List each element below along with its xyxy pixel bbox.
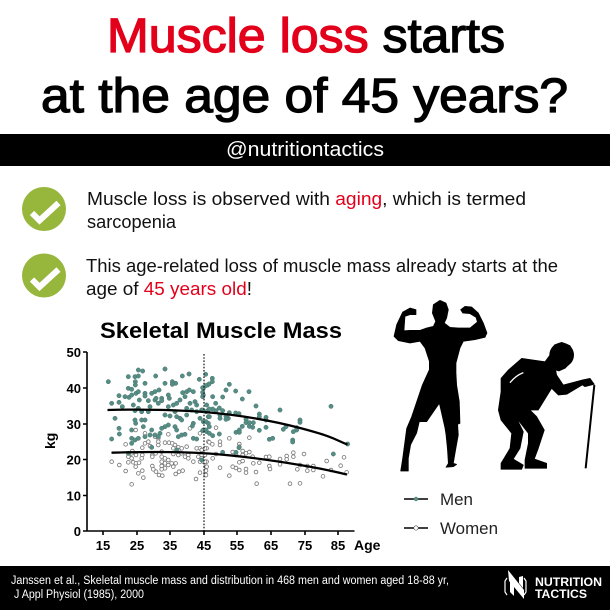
x axis labels: 25 <box>130 538 144 553</box>
men trend line <box>108 410 348 444</box>
axes <box>83 352 354 535</box>
x axis labels <box>96 538 345 553</box>
women trend line <box>112 452 347 474</box>
y axis labels: 50 <box>67 345 81 360</box>
bullet text 2 <box>86 256 558 299</box>
legend: women: Women <box>440 520 498 538</box>
y axis title: kg <box>42 433 58 449</box>
y axis labels: 20 <box>67 452 81 468</box>
footer <box>0 566 610 610</box>
icon: muscular man silhouette <box>394 300 487 471</box>
age 45 marker <box>203 354 205 531</box>
bullet 2 <box>22 254 558 299</box>
citation: Janssen et al., Skeletal muscle mass and distribution in 468 men and women aged 18-88 yr, <box>11 575 449 587</box>
men data points <box>106 367 350 462</box>
x axis labels: 35 <box>163 538 177 553</box>
icon: check mark <box>22 187 66 231</box>
y axis labels: 10 <box>67 488 81 504</box>
bullet text 2: age of 45 years old ! <box>86 279 252 299</box>
x axis labels: 65 <box>264 538 278 553</box>
logo wordmark <box>535 575 602 601</box>
x axis labels: 85 <box>331 538 345 553</box>
logo wordmark: NUTRITION <box>535 575 602 589</box>
x axis title: Age <box>354 537 381 553</box>
y axis labels <box>67 345 81 539</box>
women data points <box>110 426 348 486</box>
handle banner <box>0 134 610 166</box>
bullet text 2: This age-related loss of muscle mass already starts at the <box>86 256 558 276</box>
logo wordmark: TACTICS <box>535 587 587 601</box>
icon: check mark <box>22 254 66 298</box>
scatter chart <box>42 345 381 553</box>
title: at the age of 45 years? <box>41 70 568 123</box>
x axis labels: 15 <box>96 538 110 553</box>
icon: elderly man with cane silhouette <box>498 342 594 469</box>
legend: men: Men <box>440 491 473 509</box>
x axis labels: 45 <box>197 538 211 553</box>
bullet text 1 <box>87 189 526 232</box>
chart heading: Skeletal Muscle Mass <box>100 318 342 343</box>
logo mark <box>505 570 526 599</box>
bullet text 1: sarcopenia <box>87 212 177 232</box>
y axis labels: 30 <box>67 417 81 432</box>
x axis labels: 75 <box>298 538 312 553</box>
bullet text 1: Muscle loss is observed with aging, which is termed <box>87 189 526 209</box>
y axis labels: 0 <box>74 524 81 539</box>
legend <box>404 491 498 538</box>
citation <box>11 575 449 601</box>
x axis labels: 55 <box>230 538 244 553</box>
citation: J Appl Physiol (1985), 2000 <box>14 589 144 601</box>
title <box>41 10 568 123</box>
bullet 1 <box>22 187 526 232</box>
y axis labels: 40 <box>67 381 81 396</box>
handle banner: @nutritiontactics <box>226 139 384 161</box>
title: Muscle loss starts <box>107 10 505 63</box>
